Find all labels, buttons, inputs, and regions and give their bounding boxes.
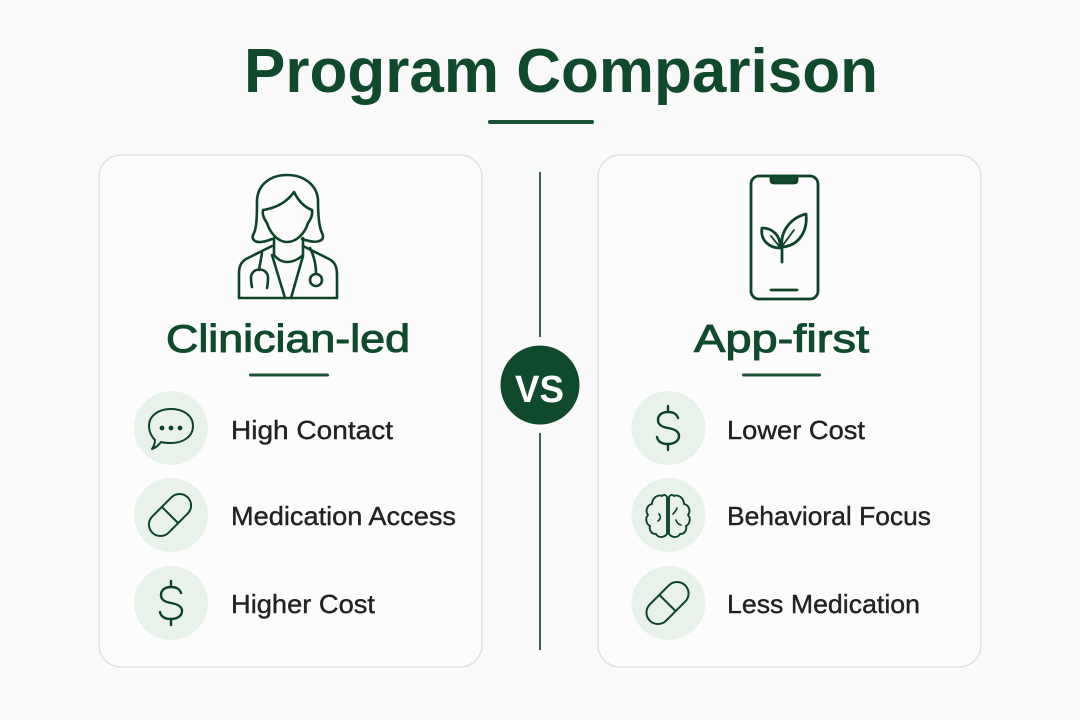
icon: phone with leaf [751,176,818,299]
icon: dollar sign [657,406,679,450]
icon: speech bubble [149,409,193,449]
item: less medication: Less Medication [727,589,920,619]
title: Program Comparison [244,37,878,106]
item: behavioral focus [632,478,931,552]
title underline [488,120,594,124]
item: behavioral focus: Behavioral Focus [727,501,931,531]
heading underline [742,374,821,376]
item: medication access [134,478,456,552]
item: lower cost: Lower Cost [727,415,866,445]
icon: brain [646,495,690,537]
panel: app-first [598,155,981,667]
heading: clinician-led: Clinician-led [166,318,410,361]
icon: capsule [642,577,693,629]
icon: dollar sign [160,581,182,625]
centre divider with VS badge [500,172,580,650]
item: less medication [632,566,920,640]
heading underline [249,374,329,376]
item: high contact: High Contact [231,415,394,445]
item: higher cost: Higher Cost [231,589,376,619]
item: higher cost [134,566,376,640]
heading: app-first: App-first [694,318,869,361]
icon: capsule [144,489,196,541]
panel: clinician-led [99,155,482,667]
item: medication access: Medication Access [231,501,456,531]
centre divider with VS badge: VS [515,369,564,411]
item: lower cost [632,391,866,465]
icon: female clinician [239,175,337,298]
item: high contact [134,391,394,465]
